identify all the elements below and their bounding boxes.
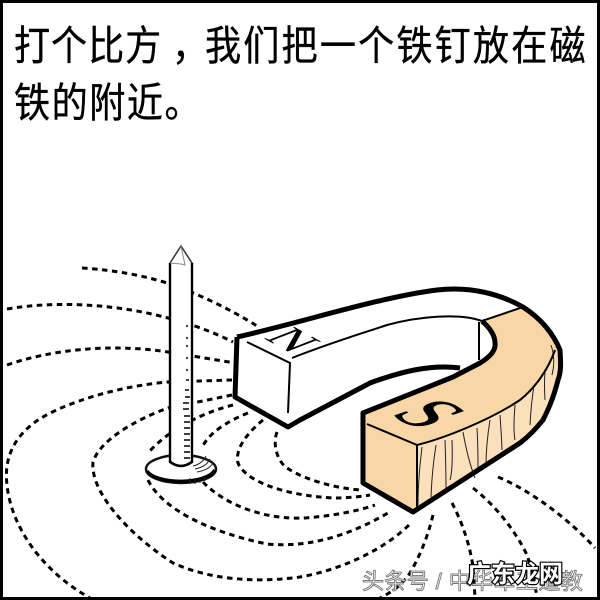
letter S: S <box>372 391 488 436</box>
watermark: source: 头条号 / 中华军工道教 <box>362 569 583 594</box>
nail shaft and tip <box>170 246 192 466</box>
magnet outlines <box>237 289 561 512</box>
letter N: N <box>252 322 332 358</box>
heading: caption text: 铁的附近。 <box>14 81 202 127</box>
watermark: site logo: 广东龙网 <box>467 561 563 588</box>
icon: iron nail <box>146 246 216 484</box>
heading: caption text: 打个比方 <box>14 24 162 70</box>
magnetic field lines <box>6 268 595 598</box>
heading: caption text <box>14 24 588 127</box>
heading: caption text: 我们把一个铁钉放在磁 <box>205 24 588 70</box>
nail thread marks <box>183 326 190 458</box>
nail head <box>146 455 216 483</box>
magnet side face <box>417 350 558 507</box>
magnet north arm (white) <box>235 289 523 427</box>
icon: horseshoe magnet <box>235 289 561 512</box>
magnet south arm (tan) <box>363 307 561 512</box>
heading: caption text: ， <box>172 24 208 70</box>
wood grain <box>418 345 554 505</box>
